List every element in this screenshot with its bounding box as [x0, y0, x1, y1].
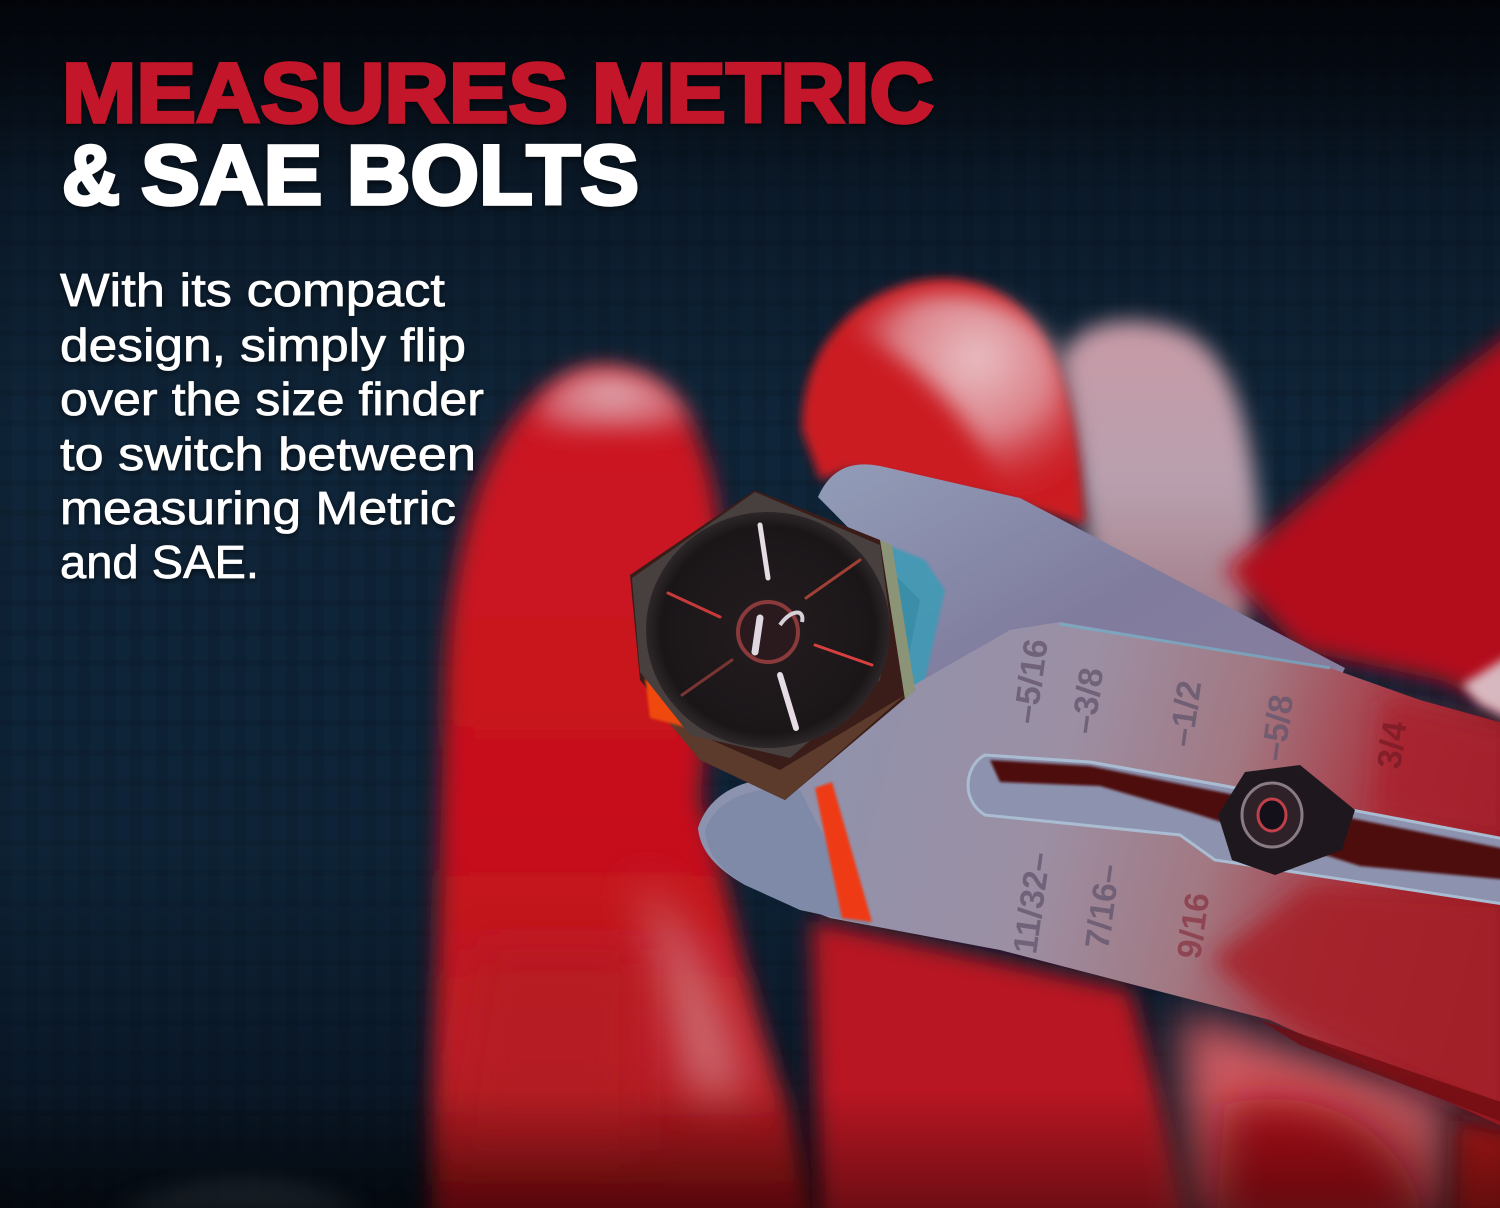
index finger [432, 367, 815, 1208]
sleeve at bottom left [110, 1179, 370, 1208]
markings: 11/32– [1006, 850, 1058, 956]
middle finger [802, 279, 1085, 525]
title [62, 46, 934, 222]
title line 1: red [62, 46, 934, 140]
title line 2: white: SAE BOLTS [141, 128, 639, 222]
body text: With its compact [60, 264, 445, 316]
photo: hex bolt head with markings [630, 490, 915, 800]
markings: 7/16– [1078, 862, 1128, 951]
slot [968, 755, 1500, 905]
red band lower right [1210, 885, 1500, 1125]
right pale edge [1462, 655, 1500, 720]
rivet [1218, 765, 1355, 875]
photo: blurred hand [0, 279, 1500, 1208]
markings: –3/8 [1064, 665, 1111, 736]
markings: 3/4 [1370, 719, 1415, 771]
right hand red area [1225, 320, 1500, 720]
body text: over the size finder [60, 373, 484, 425]
ring finger [1060, 321, 1262, 640]
lower left blade [705, 788, 870, 925]
title line 2: white: & [62, 128, 120, 222]
middle fingertip highlight [850, 294, 1080, 510]
lower right palm [1180, 1010, 1450, 1208]
index fingertip highlight [520, 370, 705, 450]
photo: tool upper jaw [818, 464, 1345, 760]
body text: design, simply flip [60, 319, 466, 371]
markings: –1/2 [1162, 678, 1209, 749]
body text [60, 264, 484, 588]
markings: –5/8 [1254, 692, 1301, 763]
upper right red band [1375, 700, 1500, 845]
body text: and SAE. [60, 536, 259, 588]
title line 1: red: MEASURES [62, 46, 568, 140]
markings [1006, 637, 1415, 961]
body text: measuring Metric [60, 482, 456, 534]
markings: –5/16 [1006, 637, 1056, 726]
title line 1: red: METRIC [592, 46, 934, 140]
photo: tool scale plate with slot and size markings [698, 622, 1500, 1130]
body text: to switch between [60, 428, 476, 480]
markings: 9/16 [1170, 890, 1217, 961]
